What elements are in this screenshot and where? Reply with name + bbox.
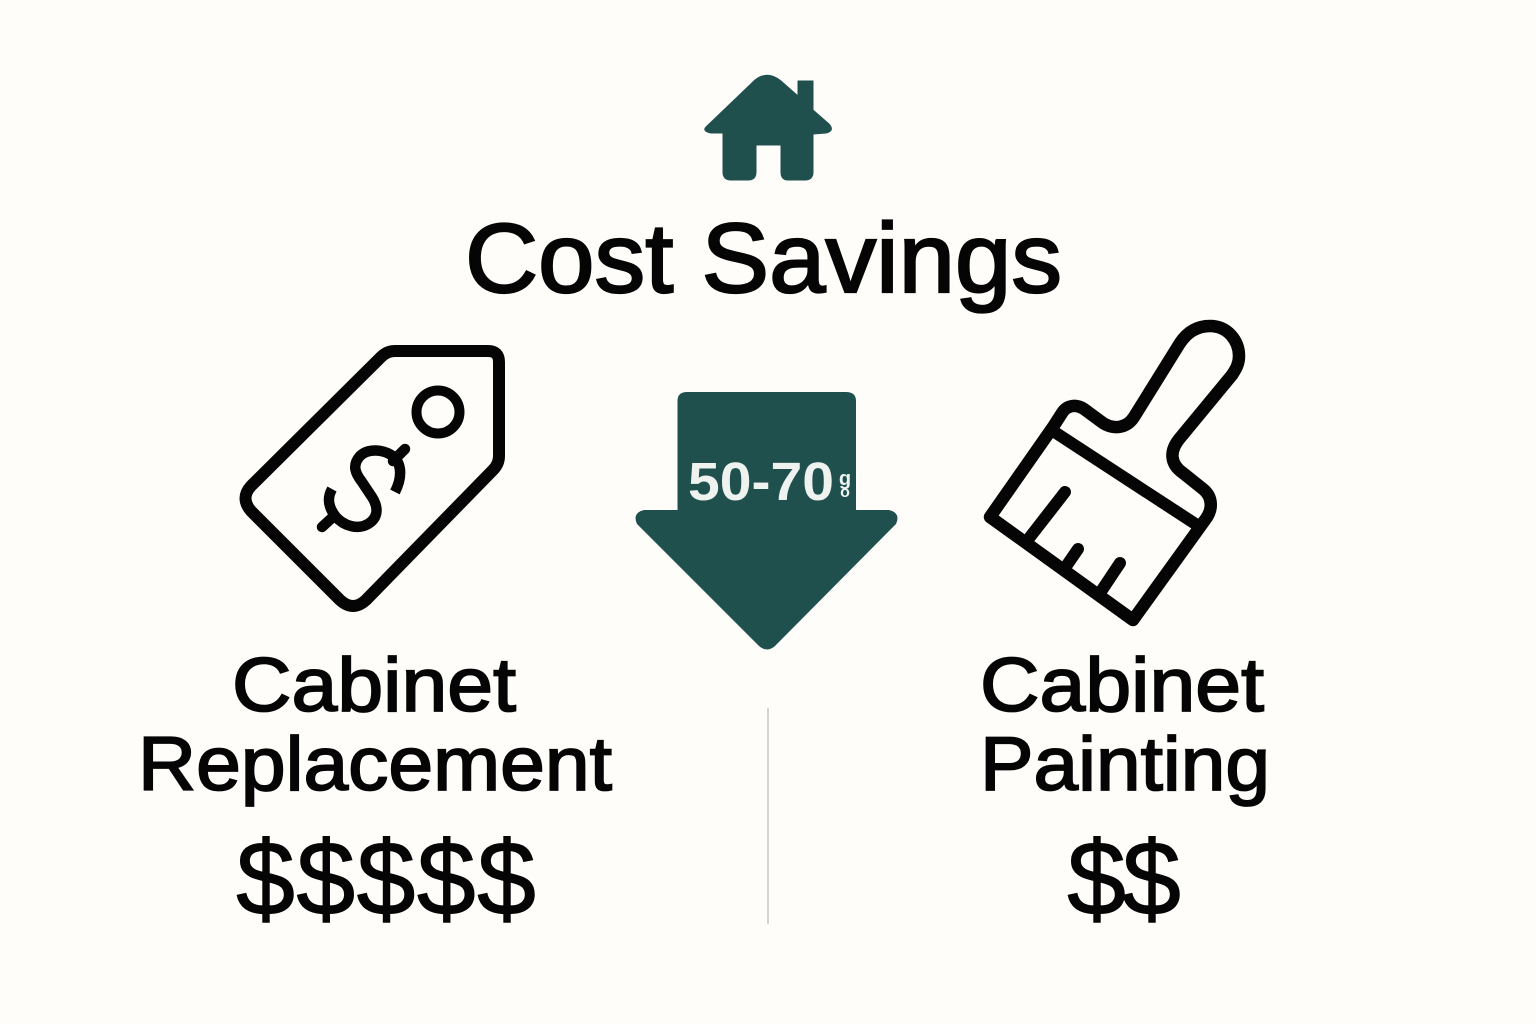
right column label <box>980 643 1270 807</box>
arrow unit glyphs: g <box>839 468 851 490</box>
icon: paint brush <box>990 326 1239 620</box>
center divider <box>767 708 769 924</box>
icon: house <box>705 75 831 180</box>
arrow with percentage <box>636 392 897 650</box>
right column label: Painting <box>980 722 1270 807</box>
left column label: Cabinet <box>232 643 516 728</box>
arrow value: 50-70 <box>688 452 834 512</box>
arrow unit glyphs <box>839 468 851 501</box>
icon: price tag <box>246 351 499 606</box>
arrow unit glyphs: o <box>840 484 850 501</box>
right price: $$ <box>1067 820 1181 938</box>
left price: $$$$$ <box>236 820 536 938</box>
title: Cost Savings <box>465 203 1062 313</box>
left column label: Replacement <box>138 722 612 807</box>
left column label <box>138 643 612 807</box>
dollar sign on tag <box>322 449 405 527</box>
right column label: Cabinet <box>980 643 1264 728</box>
